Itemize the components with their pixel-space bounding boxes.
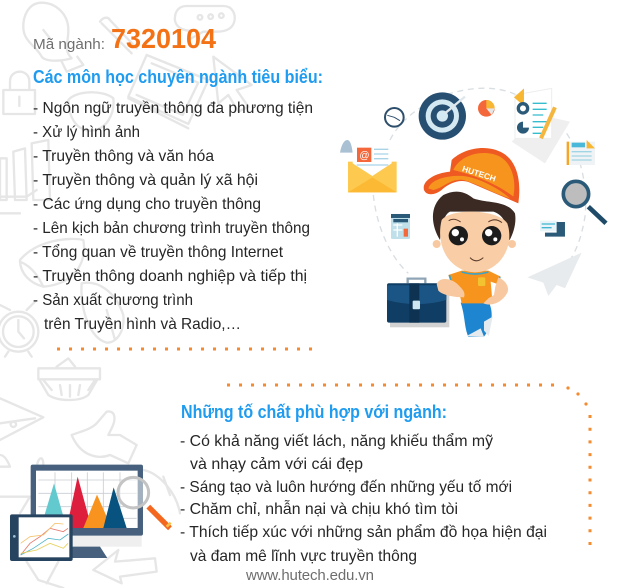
course code: Mã ngành: [33, 36, 105, 53]
course list: - Sản xuất chương trình [33, 292, 193, 309]
course list: trên Truyền hình và Radio,… [44, 316, 241, 333]
course list: - Tổng quan về truyền thông Internet [33, 243, 284, 261]
course list: - Truyền thông và quản lý xã hội [33, 172, 258, 189]
heading: suitable qualities: Những tố chất phù hợp với ngành: [181, 401, 447, 422]
icon: calculator [391, 214, 410, 239]
monitor [31, 465, 143, 558]
dashed orbit [373, 88, 586, 273]
character [424, 148, 519, 337]
course list: - Ngôn ngữ truyền thông đa phương tiện [33, 100, 313, 117]
qualities list: - Sáng tạo và luôn hướng đến những yếu tố mới [180, 479, 512, 496]
trousers [461, 303, 492, 337]
course code [33, 23, 216, 54]
magnifier [118, 477, 171, 528]
course list [33, 100, 313, 333]
icon: chat [540, 221, 565, 237]
course list: - Xử lý hình ảnh [33, 124, 140, 141]
course list: - Các ứng dụng cho truyền thông [33, 196, 261, 213]
tablet [10, 514, 73, 561]
shirt [448, 271, 501, 303]
background doodles [0, 3, 252, 200]
eyes [449, 226, 468, 245]
course code: 7320104 [111, 23, 216, 54]
icon: report and pencil [512, 88, 570, 163]
illustration: monitor and tablet charts [10, 465, 171, 561]
illustration: student with icons [340, 88, 606, 327]
icon: bell [340, 140, 353, 153]
dotted frame [227, 385, 590, 545]
course list: - Lên kịch bản chương trình truyền thông [33, 220, 310, 237]
icon: envelope [348, 144, 397, 192]
icon: magnifier [563, 181, 606, 223]
dotted divider [57, 348, 312, 350]
icon: paper plane [527, 253, 582, 296]
cap: HUTECH [461, 163, 497, 184]
heading: typical courses: Các môn học chuyên ngành tiêu biểu: [33, 66, 323, 87]
icon: pie chart [478, 100, 495, 117]
face [440, 212, 509, 272]
icon: envelope: @ [359, 151, 369, 162]
qualities list: - Có khả năng viết lách, năng khiếu thẩm mỹ [180, 432, 493, 450]
hair [433, 192, 515, 241]
qualities list: - Chăm chỉ, nhẫn nại và chịu khó tìm tòi [180, 499, 458, 518]
arms [437, 279, 464, 297]
qualities list: - Thích tiếp xúc với những sản phẩm đồ họa hiện đại [180, 523, 547, 541]
chart peaks [41, 477, 127, 528]
icon: newspaper [567, 140, 595, 165]
cap [424, 148, 519, 203]
course list: - Truyền thông doanh nghiệp và tiếp thị [33, 268, 307, 285]
shoes [467, 317, 493, 337]
qualities list: và nhạy cảm với cái đẹp [190, 456, 363, 473]
qualities list [180, 432, 547, 565]
briefcase [387, 279, 449, 327]
course list: - Truyền thông và văn hóa [33, 148, 214, 165]
qualities list: và đam mê lĩnh vực truyền thông [190, 548, 417, 565]
icon: target [419, 92, 466, 140]
website: www.hutech.edu.vn [245, 567, 374, 584]
icon: stopwatch [385, 108, 404, 127]
